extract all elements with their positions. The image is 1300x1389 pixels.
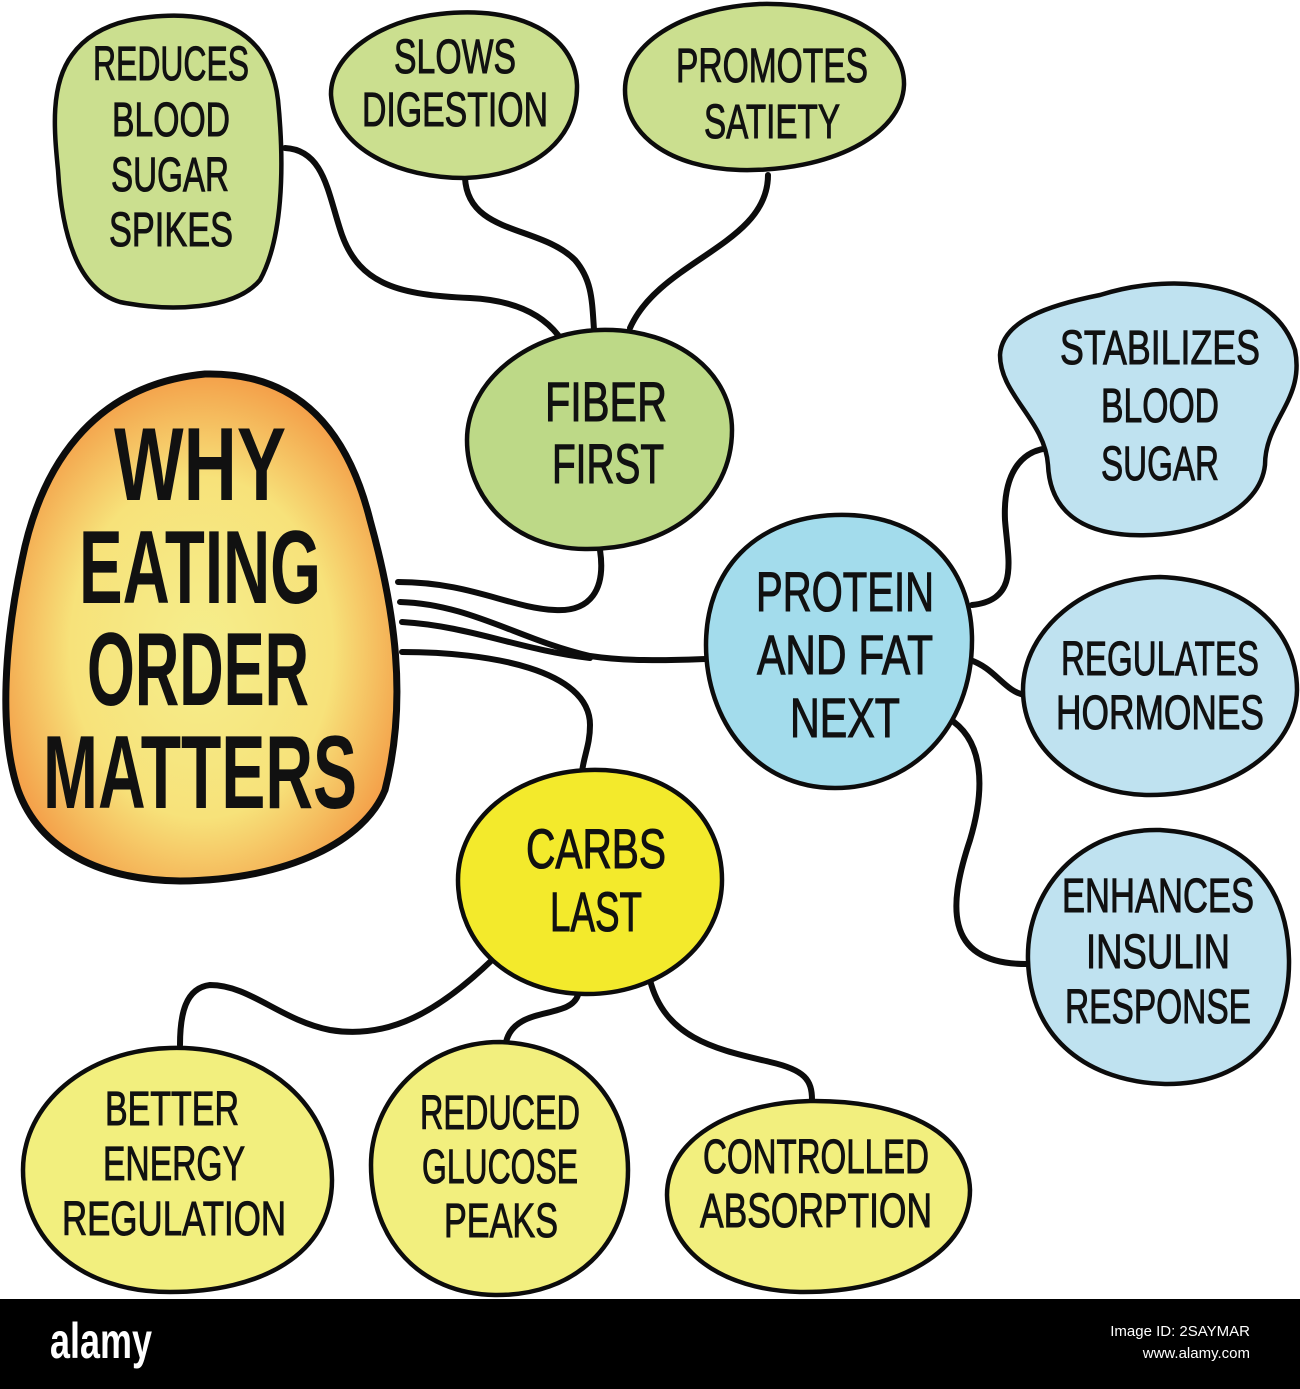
leaf: controlled absorption — [667, 1101, 970, 1292]
leaf: reduces blood sugar spikes: SPIKES — [109, 204, 233, 257]
leaf: controlled absorption: ABSORPTION — [700, 1185, 932, 1238]
node: fiber first — [467, 330, 732, 549]
footer logo: alamy — [50, 1313, 152, 1369]
footer image id: Image ID: 2SAYMAR — [1110, 1323, 1250, 1340]
node: protein and fat next: NEXT — [790, 686, 900, 749]
leaf: reduced glucose peaks — [371, 1042, 628, 1295]
leaf: reduces blood sugar spikes — [55, 16, 281, 307]
node: carbs last — [458, 770, 722, 994]
node: protein and fat next: AND FAT — [757, 623, 933, 686]
leaf: better energy regulation: ENERGY — [103, 1138, 245, 1191]
leaf: reduced glucose peaks: GLUCOSE — [422, 1141, 578, 1194]
leaf: slows digestion: DIGESTION — [362, 84, 548, 137]
main node: why eating order matters: MATTERS — [43, 715, 357, 831]
footer url: www.alamy.com — [1142, 1345, 1250, 1362]
node: fiber first: FIBER — [545, 370, 667, 433]
main node: why eating order matters: ORDER — [87, 612, 309, 728]
leaf: slows digestion: SLOWS — [394, 31, 516, 84]
leaf: reduces blood sugar spikes: SUGAR — [111, 149, 229, 202]
node: fiber first: FIRST — [552, 432, 664, 495]
footer bar — [0, 1299, 1300, 1389]
leaf: better energy regulation: BETTER — [105, 1083, 239, 1136]
leaf: stabilizes blood sugar — [1000, 284, 1297, 535]
leaf: slows digestion — [331, 12, 577, 178]
node: protein and fat next — [706, 515, 972, 788]
leaf: reduces blood sugar spikes: BLOOD — [112, 94, 230, 147]
leaf: reduced glucose peaks: PEAKS — [444, 1195, 558, 1248]
main node: why eating order matters — [6, 374, 397, 881]
leaf: stabilizes blood sugar: BLOOD — [1101, 380, 1219, 433]
leaf: enhances insulin response — [1028, 830, 1289, 1084]
leaf: promotes satiety — [625, 4, 904, 170]
leaf: reduces blood sugar spikes: REDUCES — [93, 38, 249, 91]
connectors — [180, 148, 1050, 1100]
leaf: promotes satiety: PROMOTES — [676, 40, 868, 93]
leaf: reduced glucose peaks: REDUCED — [420, 1087, 580, 1140]
main node: why eating order matters: WHY — [114, 407, 286, 523]
leaf: controlled absorption: CONTROLLED — [703, 1131, 929, 1184]
node: protein and fat next: PROTEIN — [756, 560, 934, 623]
main node: why eating order matters: EATING — [79, 510, 321, 626]
node: carbs last: CARBS — [526, 817, 666, 880]
leaf: better energy regulation — [23, 1048, 332, 1292]
leaf: enhances insulin response: INSULIN — [1086, 926, 1230, 979]
leaf: promotes satiety: SATIETY — [704, 96, 840, 149]
leaf: better energy regulation: REGULATION — [62, 1193, 286, 1246]
node: carbs last: LAST — [550, 880, 642, 943]
leaf: stabilizes blood sugar: SUGAR — [1101, 438, 1219, 491]
leaf: regulates hormones — [1023, 577, 1297, 795]
